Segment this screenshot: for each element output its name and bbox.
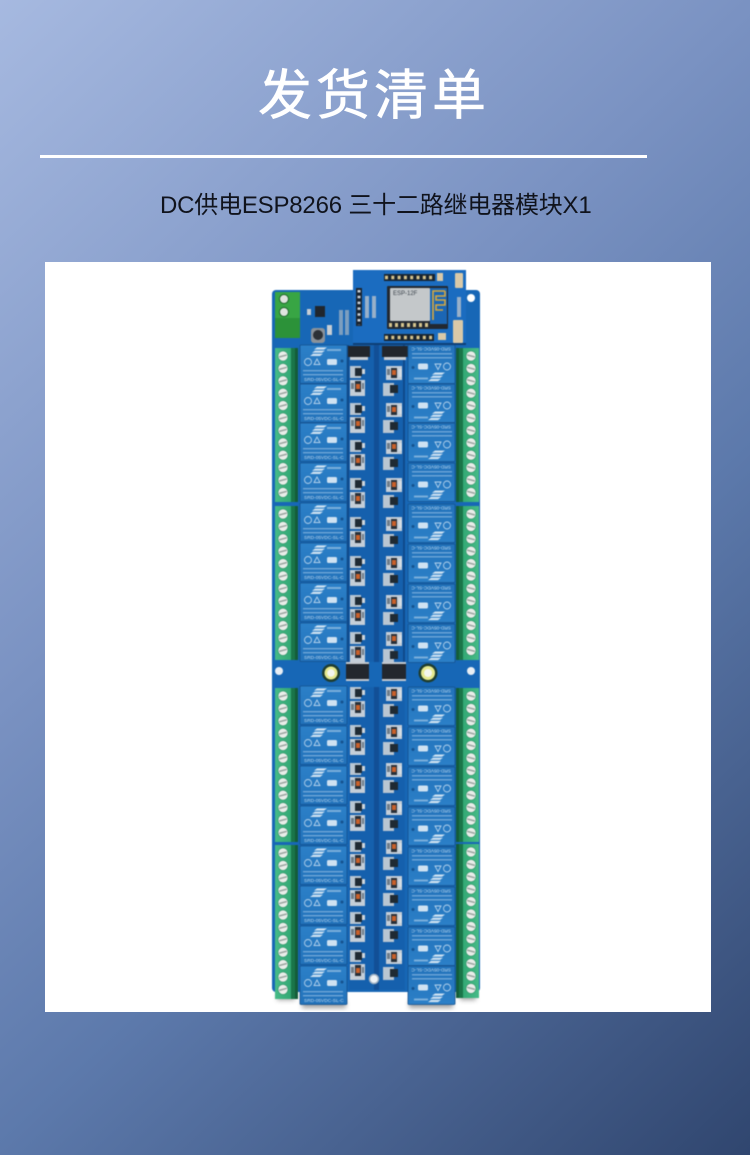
panel: product photo background (45, 262, 711, 1012)
relay column: left: SRD-05VDC-SL-C (304, 455, 344, 461)
relay column: right: SRD-05VDC-SL-C (411, 768, 451, 774)
relay column: right: SRD-05VDC-SL-C (411, 808, 451, 814)
ESP8266 wireless module board (353, 270, 466, 345)
relay column: left: SRD-05VDC-SL-C (304, 535, 344, 541)
relay column: right: SRD-05VDC-SL-C (411, 544, 451, 550)
relay column: right: SRD-05VDC-SL-C (411, 624, 451, 630)
relay column: left: SRD-05VDC-SL-C (304, 998, 344, 1004)
board drop shadows (277, 994, 476, 1008)
relay column: right: SRD-05VDC-SL-C (411, 688, 451, 694)
relay column: right: SRD-05VDC-SL-C (411, 584, 451, 590)
relay column: right: SRD-05VDC-SL-C (411, 966, 451, 972)
title underline (40, 155, 647, 158)
left pin header (356, 288, 362, 326)
relay column: left: SRD-05VDC-SL-C (304, 878, 344, 884)
relay column: right (408, 345, 455, 1004)
power input terminal block (275, 292, 300, 338)
relay column: left: SRD-05VDC-SL-C (304, 838, 344, 844)
relay column: right: SRD-05VDC-SL-C (411, 848, 451, 854)
solder pads (365, 296, 461, 318)
mounting hole: top right (467, 294, 475, 302)
main PCB (272, 290, 480, 992)
power circuit components (307, 306, 349, 343)
relay column: right: SRD-05VDC-SL-C (411, 384, 451, 390)
relay column: left: SRD-05VDC-SL-C (304, 377, 344, 383)
top driver ICs (348, 346, 408, 360)
relay column: left: SRD-05VDC-SL-C (304, 416, 344, 422)
bottom pin header (384, 334, 434, 341)
relay column: left: SRD-05VDC-SL-C (304, 798, 344, 804)
middle strip: capacitors, ICs, holes (272, 662, 480, 687)
relay column: left: SRD-05VDC-SL-C (304, 718, 344, 724)
subtitle: contents of shipment: DC供电ESP8266 三十二路继电器模块X1 (160, 192, 592, 219)
relay column: left: SRD-05VDC-SL-C (304, 655, 344, 661)
screw terminal blocks: left (275, 348, 298, 999)
title: 发货清单 (258, 66, 490, 126)
relay column: left: SRD-05VDC-SL-C (304, 918, 344, 924)
relay column: left: SRD-05VDC-SL-C (304, 758, 344, 764)
top pin header (384, 274, 435, 281)
relay column: left: SRD-05VDC-SL-C (304, 495, 344, 501)
relay column: left (300, 345, 347, 1004)
relay column: right: SRD-05VDC-SL-C (411, 464, 451, 470)
relay column: right: SRD-05VDC-SL-C (411, 346, 451, 352)
relay column: right: SRD-05VDC-SL-C (411, 728, 451, 734)
screw terminal blocks: right (456, 348, 479, 998)
relay column: right: SRD-05VDC-SL-C (411, 928, 451, 934)
relay column: left: SRD-05VDC-SL-C (304, 958, 344, 964)
bottom mounting hole (370, 974, 378, 984)
ESP-12F module: ESP-12F (393, 291, 418, 297)
relay column: left: SRD-05VDC-SL-C (304, 615, 344, 621)
relay column: right: SRD-05VDC-SL-C (411, 504, 451, 510)
relay column: left: SRD-05VDC-SL-C (304, 575, 344, 581)
capacitor right (418, 664, 438, 682)
relay column: right: SRD-05VDC-SL-C (411, 888, 451, 894)
relay column: right: SRD-05VDC-SL-C (411, 424, 451, 430)
capacitor left (322, 664, 340, 682)
push buttons (437, 273, 463, 343)
transistor and diode driver column: left (350, 366, 365, 980)
transistor and diode driver column: right (383, 366, 402, 980)
